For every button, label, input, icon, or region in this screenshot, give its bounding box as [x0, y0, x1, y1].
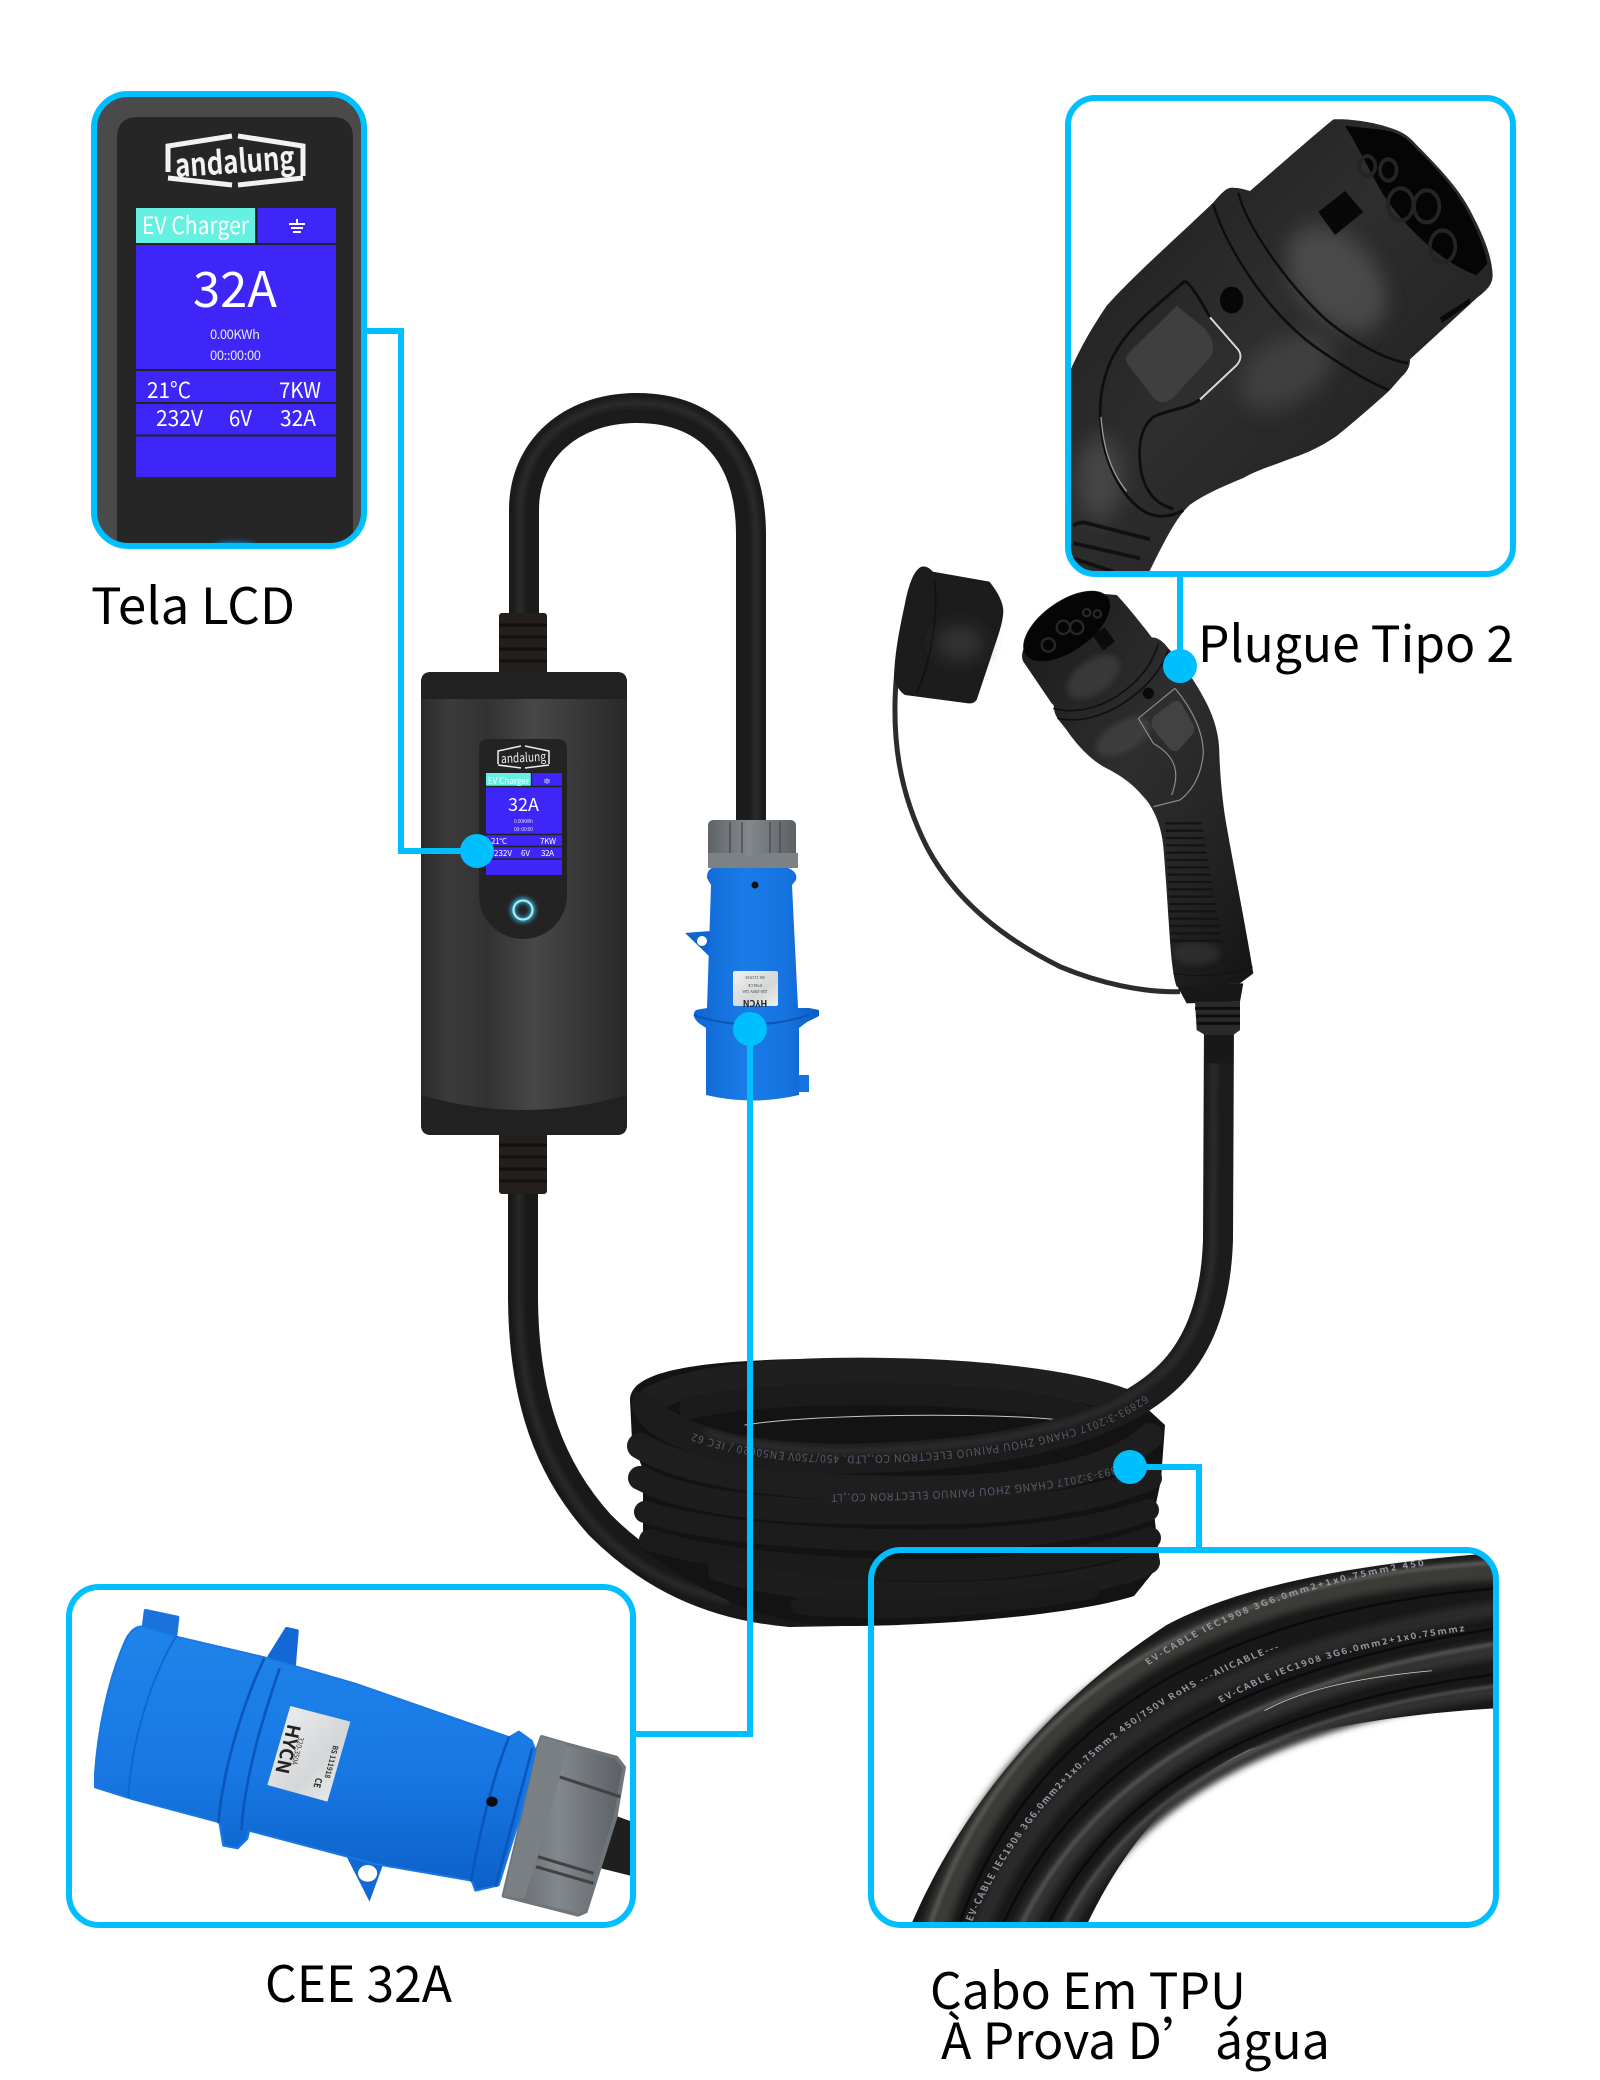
label: À Prova D'água: À Prova D’ [941, 2002, 1212, 2074]
release button [1152, 701, 1194, 751]
LCD screen: 6V [229, 401, 252, 433]
connector: cable [1113, 1450, 1199, 1548]
LCD screen: 232V [156, 401, 203, 433]
small LCD screen: 0.00KWh [514, 818, 533, 825]
button trim [1138, 688, 1203, 807]
cable print strand B: EV-CABLE IEC1908 3G6.0mm2+1x0.75mm2 450/750V RoHS ---AIICABLE--- [966, 1646, 1278, 1921]
charger bottom cap [421, 1095, 627, 1135]
strain relief top [499, 613, 547, 675]
rubber cap [894, 567, 1003, 703]
LCD screen: 32A [280, 401, 317, 433]
right tab [799, 1075, 809, 1092]
front opening [1345, 126, 1487, 275]
left cable from charger to coil [519, 1190, 900, 1612]
rating label: CE [310, 1777, 325, 1789]
gray nut [503, 1737, 624, 1915]
coil print second turn: 62893-3:2017 CHANG ZHOU PAINUO ELECTRON CO.,LTD. [832, 1467, 1115, 1502]
CEE blue plug on main product [685, 820, 819, 1100]
rating label: 220-250V 32A [742, 988, 767, 994]
ring band [1213, 193, 1408, 390]
strand highlights [929, 1561, 1534, 1929]
small andalung logo: andalung [500, 746, 546, 767]
release button [1126, 306, 1213, 402]
nose ridge [128, 1636, 176, 1798]
front opening [1011, 577, 1122, 675]
collar ridge [694, 1015, 809, 1024]
coil silhouette [630, 1359, 1165, 1626]
LCD screen: 0.00KWh [210, 324, 260, 343]
black cable [601, 1816, 632, 1876]
type 2 plug with cap on main product [894, 567, 1253, 1063]
flange shading [218, 1658, 280, 1830]
plug body [1022, 594, 1253, 987]
label: Tela LCD: Tela LCD [91, 567, 295, 639]
small LCD screen: 32A [541, 848, 554, 859]
blue plug body [694, 868, 819, 1100]
ring band [1053, 643, 1168, 720]
small LCD screen: 21°C [491, 836, 507, 847]
rating label: 320-350A [288, 1736, 306, 1766]
small LCD screen: 232V [494, 848, 512, 859]
small LCD screen [486, 773, 562, 875]
panel: CEE 32A close-up [95, 1611, 632, 1915]
strain relief [1177, 983, 1243, 1063]
device dark face [117, 117, 353, 550]
panel: TPU cable close-up [912, 1554, 1493, 1922]
flange top ear [269, 1628, 297, 1668]
LCD screen: 00::00:00 [210, 345, 261, 364]
barrel highlight [1284, 222, 1390, 337]
rating label [733, 971, 778, 1010]
bottom ear [347, 1857, 383, 1902]
body highlights [1059, 646, 1220, 965]
connector: type 2 plug [1163, 575, 1197, 683]
rating label: HYCN [743, 997, 767, 1010]
latch slot [1318, 191, 1363, 235]
ground icon [289, 219, 305, 232]
rating label: BS 111918 [321, 1744, 340, 1779]
cable loop between charger and CEE plug [520, 403, 756, 825]
white sliver between strands [1264, 1671, 1432, 1711]
frame: type 2 plug [1068, 98, 1513, 574]
grip ribs [1073, 522, 1150, 572]
coil turns [640, 1371, 1150, 1609]
indicator screw [1143, 688, 1154, 699]
LCD screen: 7KW [279, 373, 321, 405]
small LCD screen: 32A [508, 791, 539, 817]
frame: CEE [69, 1587, 633, 1925]
pin holes [1042, 609, 1101, 652]
coil print front turn: 62893-3:2017 CHANG ZHOU PAINUO ELECTRON CO.,LTD. 450/750V EN50620 / IEC 62893-3:2017 CHANG ZHOU PAINUO ELECTRON CO.,LTD. [692, 1396, 1148, 1464]
small LCD screen: 7KW [540, 836, 556, 847]
plug silhouette [1063, 119, 1493, 574]
neck ridge [471, 1737, 532, 1887]
charger top cap [421, 672, 627, 699]
lower grip highlight [1077, 436, 1123, 520]
label: Plugue Tipo 2: Plugue Tipo 2 [1198, 605, 1514, 677]
rating label [267, 1706, 350, 1802]
charger body [421, 672, 627, 1135]
left ear [685, 931, 711, 958]
connector: LCD to charger [367, 331, 494, 868]
screw hole [752, 882, 758, 888]
gray cable nut [708, 820, 798, 868]
lower notch [1440, 298, 1470, 323]
LED glow [212, 538, 258, 543]
strain relief bottom [499, 1132, 547, 1194]
panel: LCD screen close-up [94, 94, 364, 551]
small LCD screen: 6V [521, 848, 530, 859]
trim lines [1100, 281, 1240, 516]
strand seams [958, 1586, 1534, 1929]
LCD screen: 21°C [147, 373, 191, 405]
cable print strand A: EV-CABLE IEC1908 3G6.0mm2+1x0.75mm2 450 [1144, 1560, 1424, 1665]
LCD screen [136, 206, 336, 477]
rating label: BS 111918 [745, 974, 765, 980]
small LCD screen: EV Charger [488, 774, 529, 787]
power cable coil [630, 1359, 1165, 1626]
blue plug body [95, 1626, 535, 1891]
charger front face [479, 739, 567, 939]
label: À Prova D'água: água [1215, 2002, 1330, 2074]
screw hole [486, 1797, 498, 1807]
latch slot [1092, 627, 1115, 651]
right cable from plug into coil [647, 1020, 1219, 1458]
rating label: IP44 CE [747, 982, 762, 988]
power ring indicator [513, 900, 533, 920]
indicator screw [1220, 287, 1243, 313]
rating label: HYCN [269, 1722, 307, 1776]
cable bundle silhouette [909, 1550, 1534, 1929]
device housing [94, 94, 364, 546]
frame: cable [871, 1550, 1496, 1925]
connector: CEE plug [635, 1012, 767, 1734]
LCD screen: EV Charger [142, 206, 250, 241]
pin holes [1359, 156, 1455, 263]
tether strap [895, 673, 1180, 992]
label: CEE 32A: CEE 32A [265, 1945, 453, 2017]
small LCD screen: 00::00:00 [514, 826, 533, 833]
frame: LCD [94, 94, 364, 546]
small LCD screen: ≑ [543, 774, 551, 787]
cable print strand C: EV-CABLE IEC1908 3G6.0mm2+1x0.75mmz [1218, 1626, 1464, 1703]
LCD screen: 32A [193, 251, 277, 322]
label: Cabo Em TPU: Cabo Em TPU [930, 1952, 1246, 2024]
panel frames [69, 94, 1513, 1925]
charger control box [421, 672, 627, 1135]
panel: type 2 plug close-up [1063, 119, 1493, 574]
handle end line [1173, 967, 1253, 976]
top ear [144, 1611, 177, 1635]
grip ribs [1165, 823, 1222, 941]
body highlight [1240, 332, 1334, 411]
andalung logo: andalung [173, 133, 296, 187]
